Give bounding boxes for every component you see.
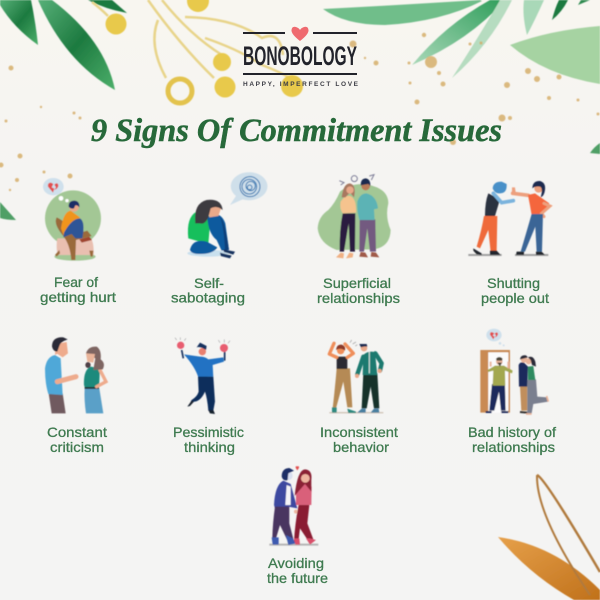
label: Bad history of	[468, 424, 556, 440]
label: Constant	[47, 424, 107, 440]
icon: person in armchair	[43, 178, 101, 261]
icon: arguing couple	[45, 337, 106, 413]
label: Inconsistent	[320, 424, 398, 440]
label	[481, 275, 549, 306]
label: behavior	[333, 439, 389, 455]
panel: Shutting people out	[468, 181, 550, 306]
label: Self-	[194, 275, 224, 291]
icon: couple walking hand in hand	[269, 466, 318, 545]
label	[173, 424, 244, 455]
label	[267, 555, 328, 586]
left small leaf	[0, 202, 16, 220]
label: people out	[481, 290, 549, 306]
logo wordmark: BONOBOLOGY	[243, 41, 357, 71]
panel: Fear of getting hurt	[40, 178, 116, 305]
panel: Avoiding the future	[267, 466, 328, 586]
icon: man at door seeing couple	[480, 329, 548, 414]
label	[317, 275, 400, 306]
logo	[243, 27, 359, 88]
logo rules	[243, 33, 357, 74]
icon: woman raising hand at man	[468, 181, 550, 255]
label	[171, 275, 245, 306]
label: relationships	[317, 290, 400, 306]
bottom-right orange leaves	[498, 475, 600, 600]
top-right green leaves	[323, 0, 600, 154]
label	[47, 424, 107, 455]
top-left green leaves	[0, 0, 127, 90]
label	[468, 424, 556, 455]
gold splatter dots	[0, 33, 600, 191]
panel: Pessimistic thinking	[173, 337, 244, 455]
panel: Inconsistent behavior	[320, 340, 398, 455]
label	[40, 274, 116, 305]
panel: Constant criticism	[45, 337, 107, 455]
label: sabotaging	[171, 290, 245, 306]
panel: Bad history of relationships	[468, 329, 556, 455]
icon: person hugging knees with scribble bubble	[187, 172, 267, 258]
label: the future	[267, 570, 328, 586]
title: 9 Signs Of Commitment Issues	[91, 113, 502, 149]
gold floral branches	[92, 0, 303, 103]
icon: person holding red bulbs	[175, 337, 230, 414]
icon: upset woman and man	[329, 340, 383, 413]
label: Shutting	[487, 275, 540, 291]
logo tagline: HAPPY, IMPERFECT LOVE	[243, 81, 359, 88]
label: criticism	[50, 439, 104, 455]
label: relationships	[472, 439, 555, 455]
icon: couple with arms crossed	[318, 175, 391, 258]
label: getting hurt	[40, 289, 116, 305]
panel: Self-sabotaging	[171, 172, 267, 306]
panel: Superficial relationships	[317, 175, 400, 306]
label: Pessimistic	[173, 424, 244, 440]
label: Avoiding	[268, 555, 324, 571]
label	[320, 424, 398, 455]
label: Fear of	[54, 274, 98, 290]
label: Superficial	[323, 275, 391, 291]
label: thinking	[184, 439, 235, 455]
logo heart	[291, 27, 309, 41]
